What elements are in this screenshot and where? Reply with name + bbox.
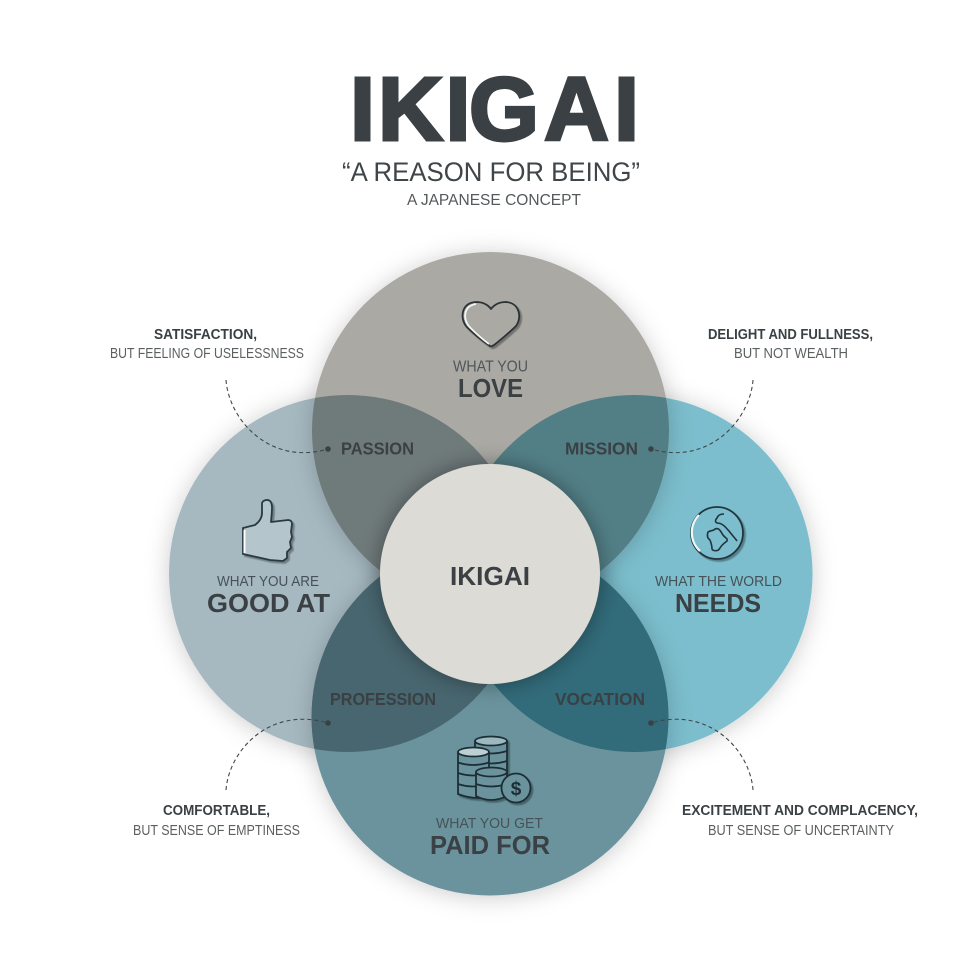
overlap: vocation	[494, 576, 668, 752]
callout: comfortable: BUT SENSE OF EMPTINESS	[133, 823, 300, 839]
callout: satisfaction: SATISFACTION,	[154, 327, 257, 343]
label: what the world needs: WHAT THE WORLD	[655, 573, 782, 590]
label: what you love	[453, 358, 528, 403]
label: passion: PASSION	[341, 438, 414, 458]
connector: mission	[648, 380, 753, 453]
label: what you get paid for: PAID FOR	[430, 830, 550, 860]
circle: paid for	[312, 538, 668, 896]
label: mission: MISSION	[565, 438, 638, 458]
connector: profession	[226, 719, 331, 790]
dollar coin: $	[511, 779, 522, 800]
label: what you get paid for: WHAT YOU GET	[436, 815, 543, 832]
callout: comfortable	[133, 803, 300, 839]
label: what you are good at: WHAT YOU ARE	[217, 573, 319, 590]
tagline: A JAPANESE CONCEPT	[407, 192, 581, 209]
callout: excitement	[682, 803, 918, 839]
label: vocation: VOCATION	[555, 689, 645, 709]
label: what you are good at	[207, 573, 330, 618]
callout: delight: DELIGHT AND FULLNESS,	[708, 327, 873, 343]
circle: good at	[169, 395, 526, 752]
back coin stack	[475, 736, 507, 780]
callout: delight	[708, 327, 873, 362]
callout: satisfaction	[110, 327, 304, 362]
label: what you love: WHAT YOU	[453, 358, 528, 376]
callout: excitement: EXCITEMENT AND COMPLACENCY,	[682, 803, 918, 819]
overlap: profession	[312, 576, 488, 752]
callout: comfortable: COMFORTABLE,	[163, 803, 270, 819]
circle: love	[312, 252, 669, 609]
icon: thumbs up	[243, 500, 292, 561]
label: what you love: LOVE	[458, 375, 523, 403]
callout: delight: BUT NOT WEALTH	[734, 346, 848, 362]
center circle	[380, 464, 600, 684]
subtitle: “A REASON FOR BEING”	[342, 157, 640, 187]
connector: passion	[226, 380, 331, 453]
callout: satisfaction: BUT FEELING OF USELESSNESS	[110, 346, 304, 362]
venn diagram	[169, 252, 812, 896]
icon: globe	[691, 507, 743, 559]
label: profession: PROFESSION	[330, 689, 436, 709]
label: what the world needs	[655, 573, 782, 618]
label: what you get paid for	[430, 815, 550, 860]
icon: heart	[463, 302, 519, 346]
center label: IKIGAI	[450, 561, 530, 591]
circle: the world needs	[456, 395, 812, 752]
front coin stack	[476, 768, 507, 800]
label: what the world needs: NEEDS	[675, 588, 761, 618]
left coin stack	[458, 748, 489, 798]
overlap: passion	[312, 395, 488, 570]
connector: vocation	[648, 719, 753, 790]
overlap: mission	[493, 395, 669, 572]
icon: coins	[458, 736, 530, 802]
callout: excitement: BUT SENSE OF UNCERTAINTY	[708, 823, 894, 839]
label: what you are good at: GOOD AT	[207, 588, 330, 618]
title: IKIGAI	[350, 60, 639, 160]
